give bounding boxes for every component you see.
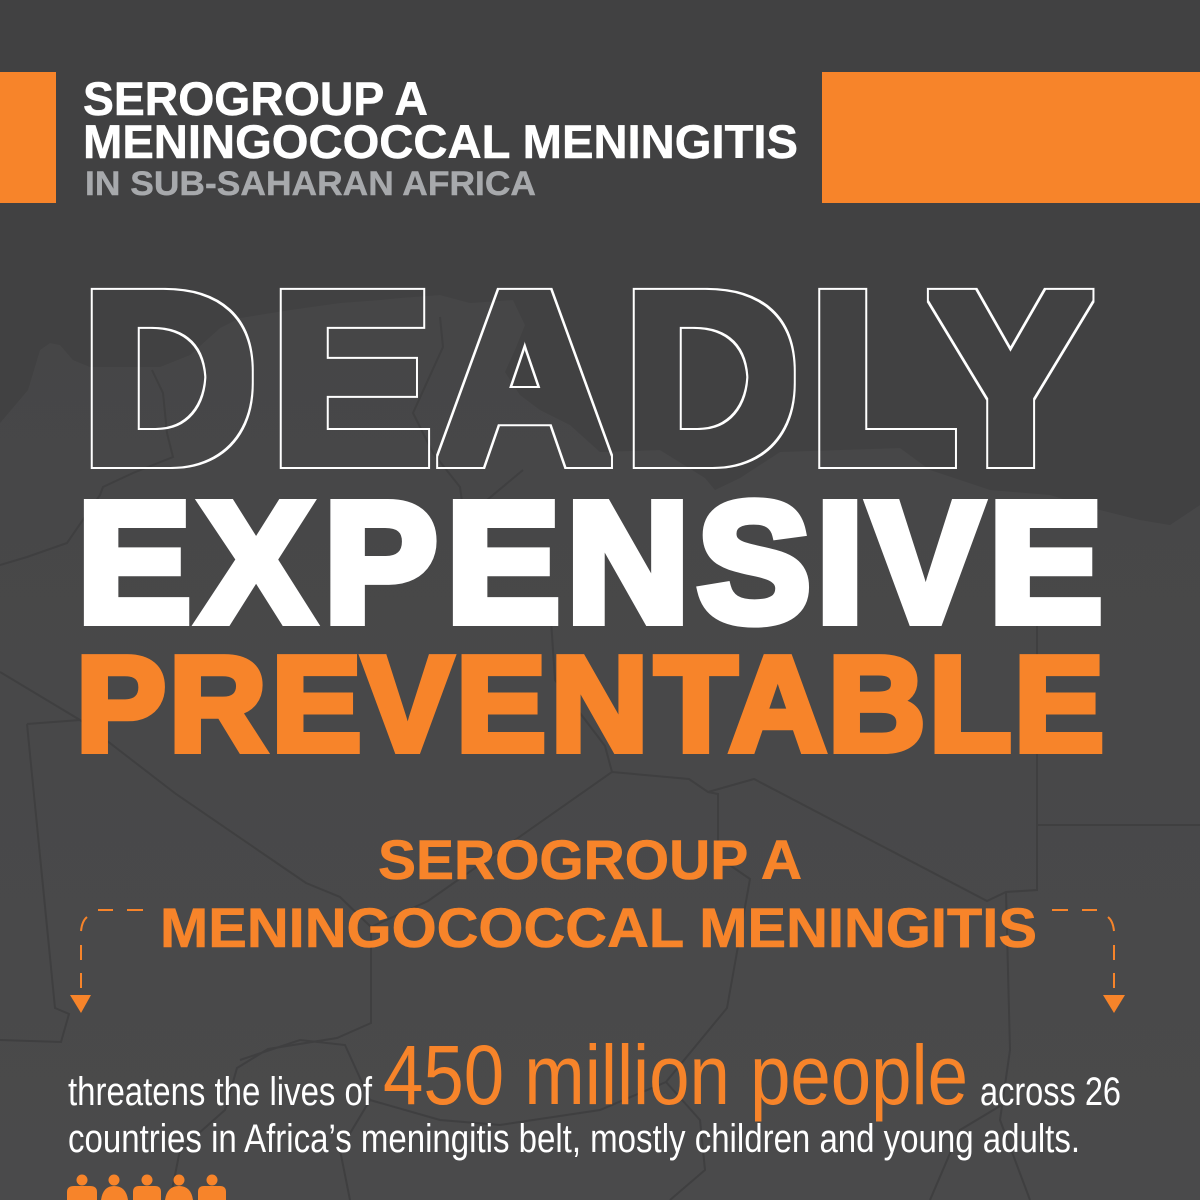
header line 2: MENINGOCOCCAL MENINGITIS — [83, 115, 798, 168]
body: threatens the lives of: threatens the lives of — [68, 1070, 373, 1114]
header subtitle: IN SUB-SAHARAN AFRICA — [85, 165, 536, 203]
header bar: right — [822, 72, 1200, 203]
arrow: left dashed — [70, 910, 143, 1013]
subheading line 1: SEROGROUP A — [378, 828, 802, 891]
body text — [68, 1028, 1121, 1161]
body: across 26: across 26 — [980, 1070, 1121, 1114]
icon: man — [67, 1174, 97, 1200]
subheading line 2: MENINGOCOCCAL MENINGITIS — [160, 896, 1037, 959]
header bar: left — [0, 72, 56, 203]
icon: man — [198, 1174, 226, 1200]
map: sea area — [0, 0, 1200, 525]
headline: deadly: DEADLY — [82, 243, 1092, 514]
headline: preventable: PREVENTABLE — [76, 628, 1104, 780]
header line 1: SEROGROUP A — [83, 72, 428, 125]
map: country borders — [0, 317, 1200, 1200]
icon: man — [133, 1174, 161, 1200]
icon row: people — [67, 1174, 226, 1200]
headline: expensive: EXPENSIVE — [78, 468, 1102, 658]
header title — [83, 72, 798, 203]
icon: woman — [165, 1174, 193, 1200]
arrow: right dashed — [1052, 910, 1125, 1013]
icon: woman — [101, 1174, 128, 1200]
statistic: 450 million people: 450 million people — [383, 1028, 968, 1122]
